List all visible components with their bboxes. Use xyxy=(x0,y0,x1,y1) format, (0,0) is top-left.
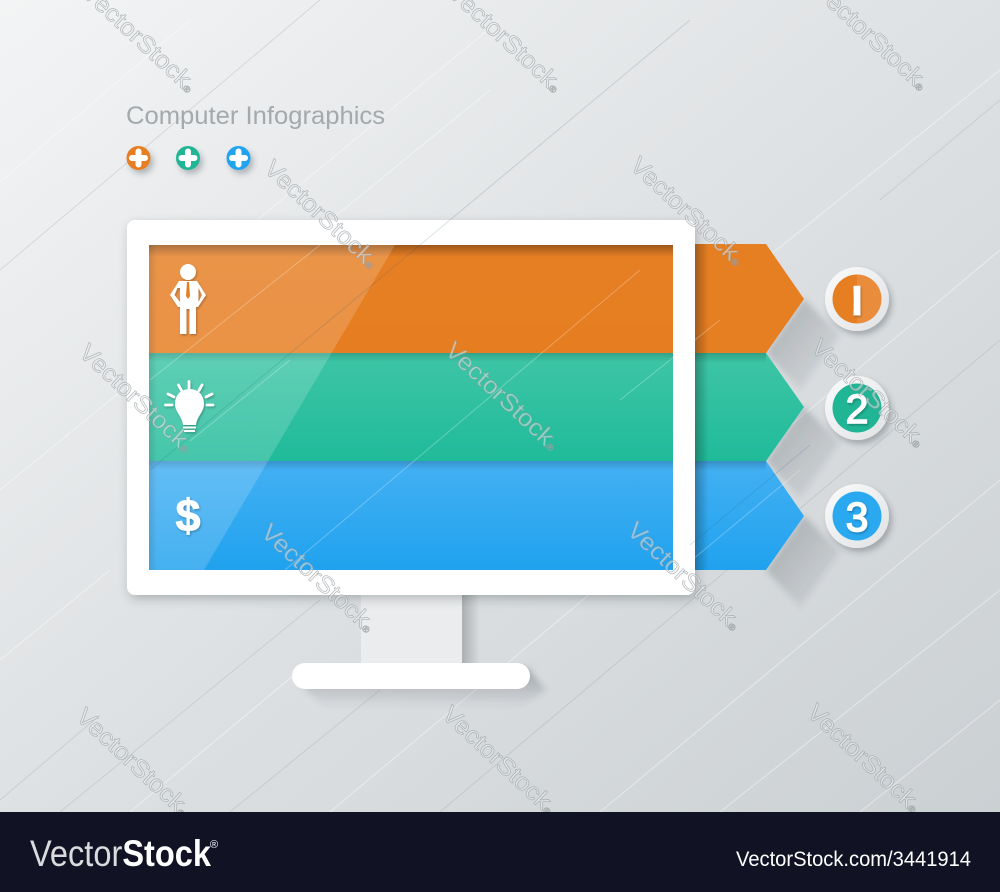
icon: orange plus button xyxy=(126,146,150,170)
number badge 3: 3 xyxy=(846,494,868,540)
number badge 2: 2 xyxy=(846,386,868,432)
panel: green band xyxy=(149,353,673,461)
panel: blue band xyxy=(149,461,673,570)
number badge 2 xyxy=(825,376,889,440)
panel: orange band xyxy=(149,245,673,353)
icon: light bulb xyxy=(166,382,213,431)
watermarks: VectorStock® xyxy=(74,339,199,458)
number badge 3 xyxy=(825,484,889,548)
monitor base xyxy=(292,663,546,708)
footer bar xyxy=(0,812,1000,892)
arrow 2: green xyxy=(690,353,804,461)
monitor stand neck xyxy=(361,590,480,666)
watermarks: VectorStock® xyxy=(625,152,750,271)
monitor frame xyxy=(127,220,695,595)
title: Computer Infographics xyxy=(126,102,385,130)
frame shadow on arrows xyxy=(695,244,709,570)
number badge 1: 1 xyxy=(844,277,868,324)
screen gloss xyxy=(149,245,395,570)
watermarks: VectorStock® xyxy=(440,337,565,456)
icon: person xyxy=(170,264,206,334)
icon: green plus button xyxy=(176,146,200,170)
watermarks: VectorStock® xyxy=(622,517,747,636)
icon: dollar sign: $ xyxy=(175,490,201,541)
watermarks: VectorStock® xyxy=(806,334,931,453)
band shadows xyxy=(149,245,673,570)
watermarks: VectorStock® xyxy=(71,703,196,822)
watermarks: VectorStock® xyxy=(259,155,384,274)
watermarks: VectorStock® xyxy=(802,699,927,818)
watermarks: VectorStock® xyxy=(437,701,562,820)
watermarks xyxy=(71,0,934,822)
number badge 1 xyxy=(825,267,889,331)
arrow 3: blue xyxy=(690,461,804,570)
icon: blue plus button xyxy=(226,146,250,170)
watermarks: VectorStock® xyxy=(256,519,381,638)
footer logo: VectorStock xyxy=(30,833,211,874)
arrow 1: orange xyxy=(690,244,804,353)
footer registered mark: ® xyxy=(210,839,218,851)
footer url: VectorStock.com/3441914 xyxy=(736,848,971,871)
arrow: long shadows behind arrows xyxy=(766,299,840,607)
